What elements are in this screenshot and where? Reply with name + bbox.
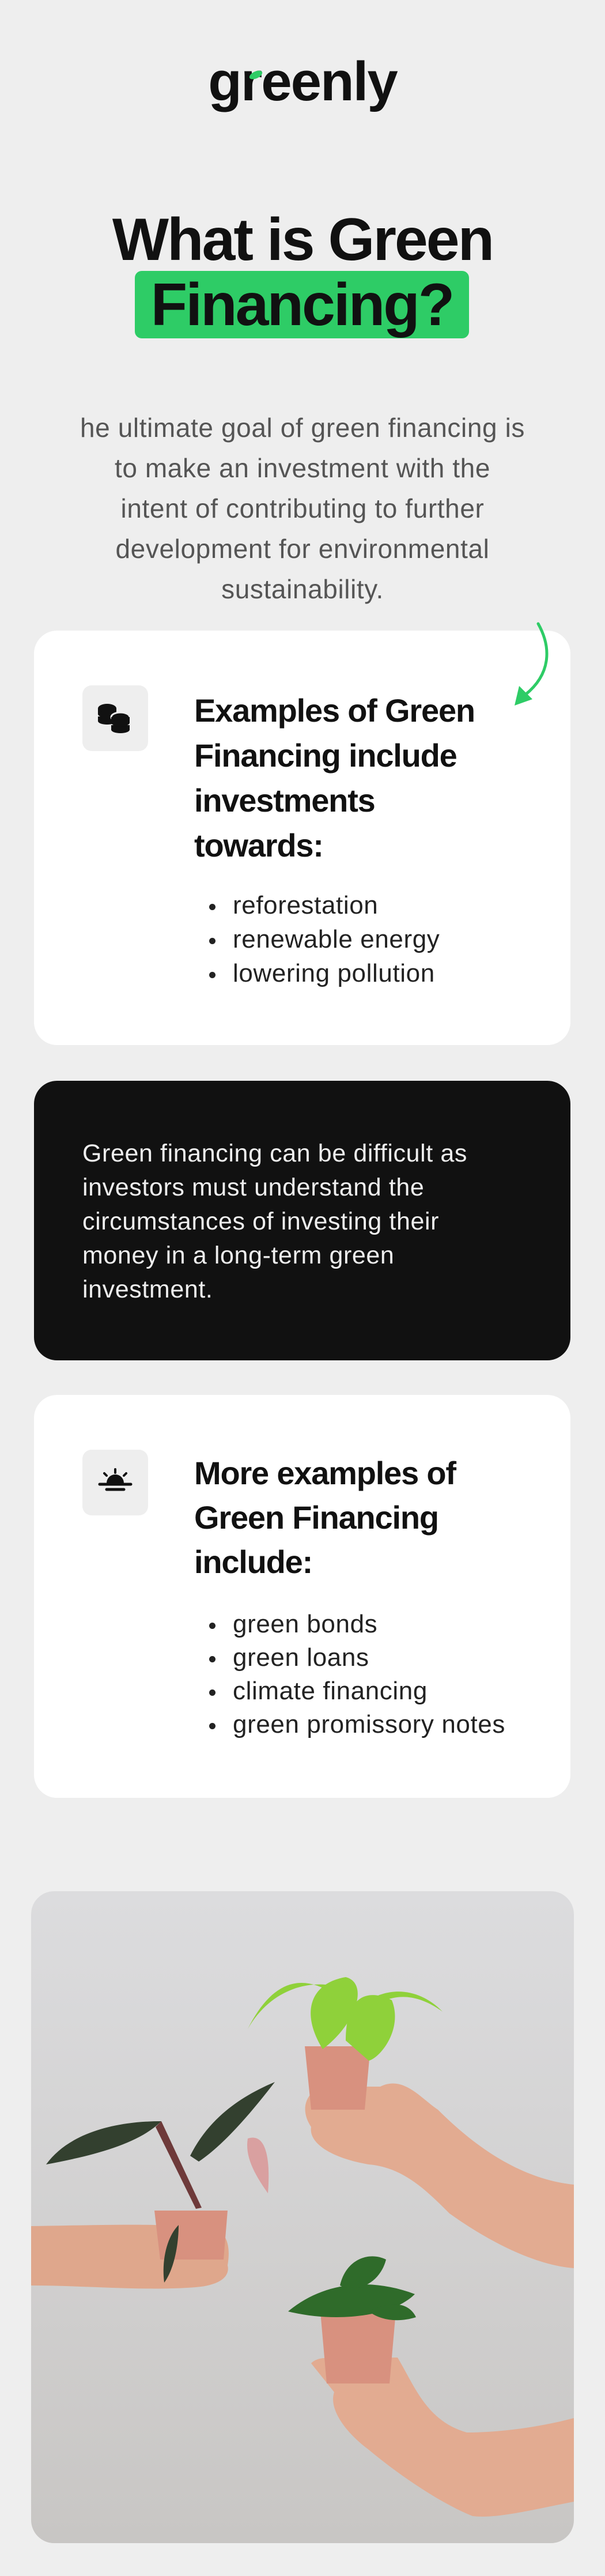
title: What is Green: [112, 206, 493, 273]
arrow: green curved: [515, 623, 549, 706]
bottom arm: [311, 2358, 574, 2517]
bottom plant leaves: [288, 2256, 416, 2320]
intro paragraph: development for environmental: [115, 534, 489, 564]
bullet list: reforestation: [233, 891, 378, 919]
callout text: [82, 1140, 467, 1303]
intro paragraph: he ultimate goal of green financing is: [80, 413, 525, 443]
bullet list: climate financing: [233, 1677, 428, 1705]
icon: sunrise: [82, 1450, 148, 1515]
intro paragraph: to make an investment with the: [115, 453, 490, 483]
top plant leaves: [248, 1977, 443, 2061]
heading: Examples of Green: [194, 692, 475, 729]
top pot: [305, 2046, 370, 2110]
heading: Green Financing: [194, 1499, 438, 1536]
bullet list: renewable energy: [233, 925, 440, 953]
logo: greenly: greenly: [208, 51, 397, 112]
photo: hands holding potted plants: [31, 1891, 574, 2543]
heading: [194, 692, 475, 863]
left plant leaves: [46, 2082, 275, 2283]
callout text: Green financing can be difficult as: [82, 1140, 467, 1167]
left arm: [31, 2225, 229, 2288]
heading: towards:: [194, 827, 323, 863]
bullet list: [209, 891, 440, 987]
bullet list: lowering pollution: [233, 959, 435, 987]
top arm: [305, 2084, 574, 2268]
heading: Financing include: [194, 737, 457, 774]
bullet list: [209, 1610, 505, 1738]
callout text: investment.: [82, 1276, 213, 1303]
bottom pot: [320, 2311, 396, 2383]
title highlight: Financing?: Financing?: [151, 271, 453, 338]
heading: [194, 1455, 456, 1580]
heading: investments: [194, 782, 375, 819]
bullet list: green loans: [233, 1643, 369, 1672]
intro paragraph: sustainability.: [221, 574, 384, 604]
title: [112, 206, 493, 338]
intro paragraph: intent of contributing to further: [121, 493, 484, 523]
bullet list: green promissory notes: [233, 1710, 505, 1738]
bullet list: green bonds: [233, 1610, 377, 1638]
heading: include:: [194, 1544, 312, 1580]
callout text: investors must understand the: [82, 1174, 424, 1201]
logo leaf accent: [248, 69, 263, 81]
callout text: money in a long-term green: [82, 1242, 394, 1269]
panel: dark callout: [34, 1081, 570, 1360]
left pot: [154, 2211, 228, 2260]
panel: examples of green financing: [34, 631, 570, 1045]
intro paragraph: [80, 413, 525, 604]
panel: more examples: [34, 1395, 570, 1798]
icon: coins: [82, 685, 148, 751]
heading: More examples of: [194, 1455, 456, 1491]
callout text: circumstances of investing their: [82, 1208, 439, 1235]
